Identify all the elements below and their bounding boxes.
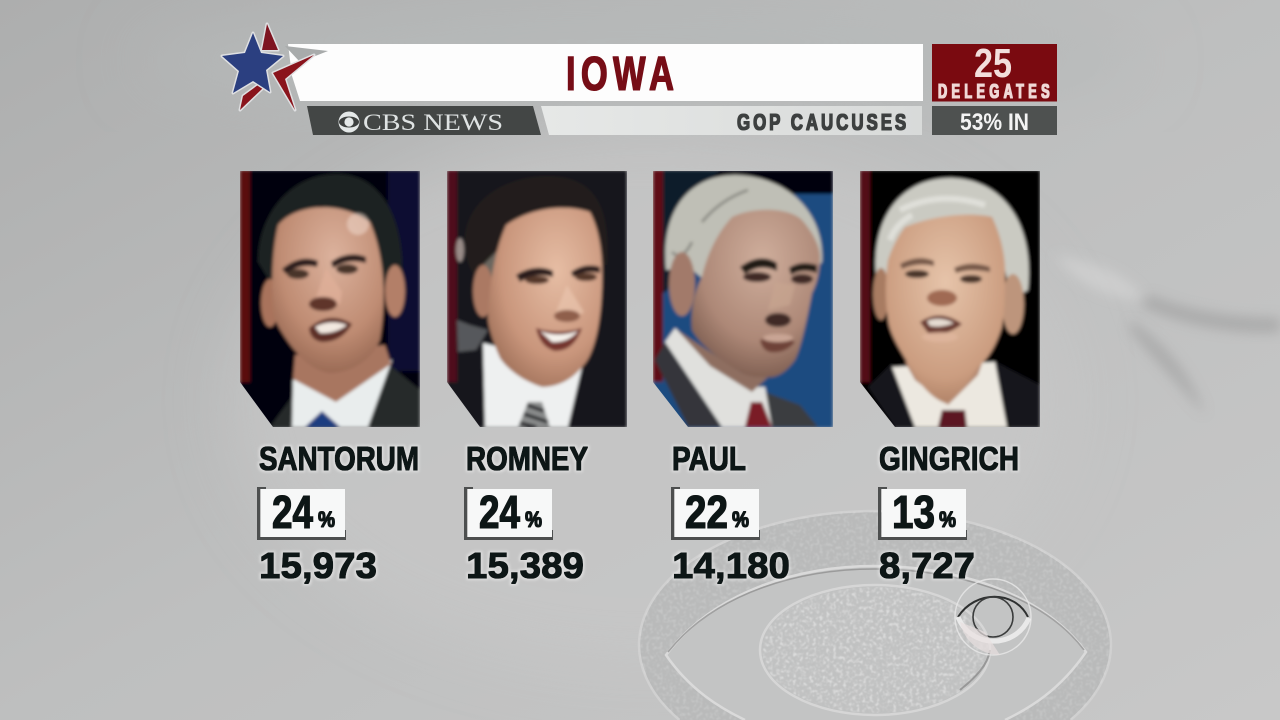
delegates box: DELEGATES [938,80,1050,103]
vote total: 15,389 [466,545,584,586]
portrait: Paul [653,170,833,428]
percent box [671,486,760,540]
CBS News plate [307,106,541,135]
percent box [878,486,967,540]
percent box [464,486,553,540]
percent box: % [939,507,956,532]
title: IOWA [566,46,674,100]
percent box: % [525,507,542,532]
candidate column: Santorum [257,440,419,586]
percent box: 24 [479,486,520,538]
name: ROMNEY [466,440,588,477]
outer band [639,511,1111,720]
percent box: % [732,507,749,532]
red top point [262,24,278,50]
embossed CBS eye watermark [639,511,1111,720]
portrait: Santorum [240,170,420,428]
portrait: Romney [447,170,627,428]
name: SANTORUM [259,440,419,477]
name: GINGRICH [879,440,1019,477]
CBS eye logo bug [955,579,1031,655]
delegates box [932,40,1057,103]
precincts reporting box: 53% IN [960,109,1029,136]
percent box: % [318,507,335,532]
candidate column: Paul [671,440,790,586]
candidate column: Romney [464,440,588,586]
percent box: 22 [685,486,728,538]
grey banner tip [285,46,328,62]
vote total: 15,973 [259,545,377,586]
vote total: 8,727 [879,545,975,586]
delegates box: 25 [974,40,1012,86]
precincts reporting box [932,106,1057,136]
portrait: Gingrich [860,170,1040,428]
red lower-left point [240,85,263,110]
candidate column: Gingrich [878,440,1019,586]
name: PAUL [672,440,746,477]
header: Iowa GOP caucuses banner [288,40,1057,136]
percent box [257,486,346,540]
textured pupil [760,585,990,715]
blue star [222,33,283,93]
subtitle text: GOP CAUCUSES [737,109,906,136]
percent box: 13 [892,486,935,538]
title bar [288,44,923,101]
CBS News wordmark: CBS NEWS [363,110,503,136]
red right chevron [273,55,314,110]
star logo [222,24,328,110]
vote total: 14,180 [672,545,790,586]
subtitle bar [541,106,922,135]
percent box: 24 [272,486,313,538]
CBS eye icon [338,112,360,132]
inner almond [666,566,1086,720]
